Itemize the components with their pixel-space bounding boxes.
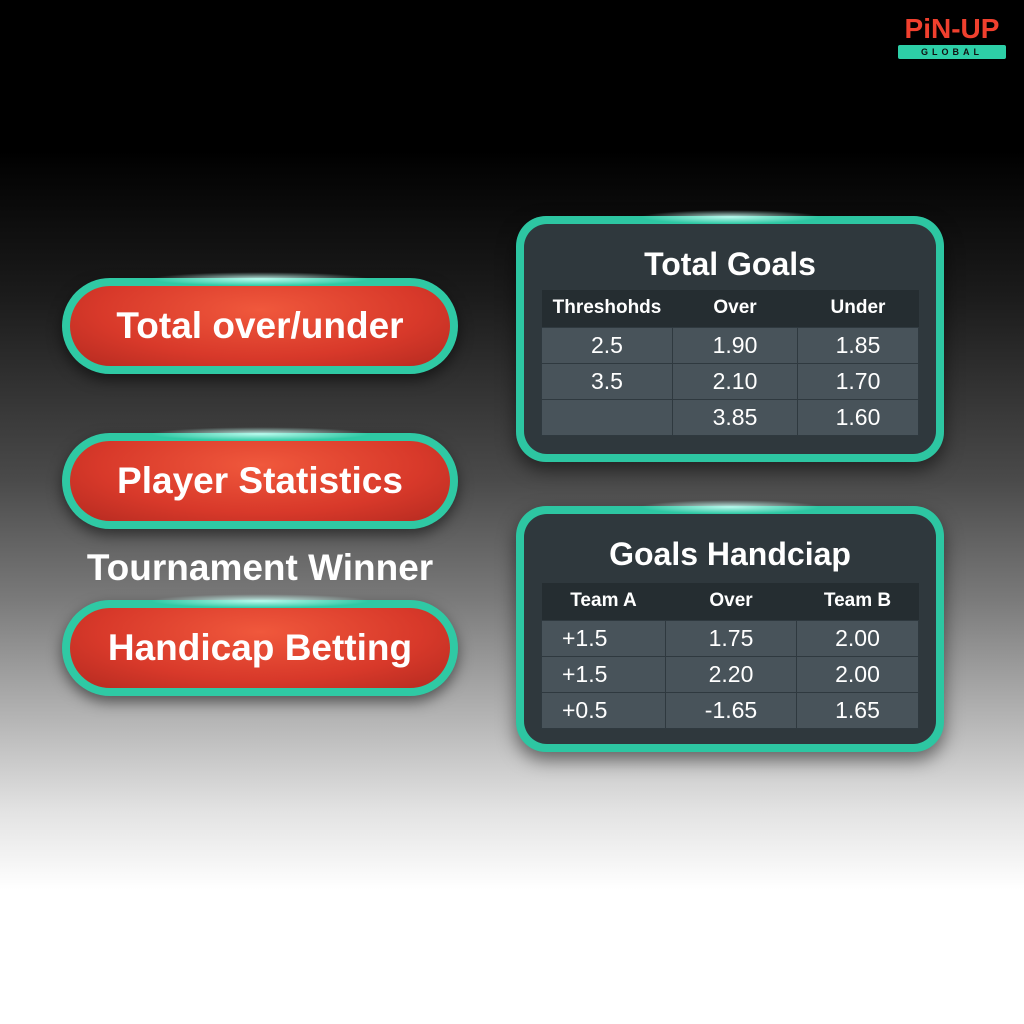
table: goals handicap: -1.65 <box>705 696 757 722</box>
table: goals handicap: 2.00 <box>835 660 880 686</box>
table: total goals: Threshohds <box>553 297 661 318</box>
table: total goals: Over <box>713 297 757 318</box>
table: total goals <box>542 290 919 435</box>
table: goals handicap: 1.65 <box>835 696 880 722</box>
table: goals handicap: +1.5 <box>562 660 607 686</box>
table: total goals: 3.5 <box>591 368 623 394</box>
pill: total over/under <box>62 278 458 374</box>
table: total goals: 1.85 <box>836 332 880 358</box>
panel: total goals <box>516 216 944 462</box>
heading: total goals: Total Goals <box>644 246 816 282</box>
table: total goals: 2.10 <box>713 368 757 394</box>
table: goals handicap: Over <box>709 590 753 611</box>
pill: player statistics <box>62 433 458 529</box>
table: total goals: 1.60 <box>836 404 880 430</box>
logo: PiN-UP <box>905 13 999 44</box>
pill: total over/under: Total over/under <box>116 305 404 346</box>
table: total goals: 3.85 <box>713 404 757 430</box>
table: goals handicap: Team B <box>824 590 891 611</box>
table: goals handicap <box>542 583 919 728</box>
pill: handicap betting: Handicap Betting <box>108 627 412 668</box>
table: goals handicap: +1.5 <box>562 624 607 650</box>
table: total goals: 1.90 <box>713 332 757 358</box>
heading: goals handicap: Goals Handciap <box>609 536 851 572</box>
table: goals handicap: 2.00 <box>835 624 880 650</box>
table: total goals: 2.5 <box>591 332 623 358</box>
table: goals handicap: Team A <box>570 590 637 611</box>
table: total goals: Under <box>831 297 885 318</box>
pill: handicap betting <box>62 600 458 696</box>
table: total goals: 1.70 <box>836 368 880 394</box>
table: goals handicap: +0.5 <box>562 696 607 722</box>
pill: player statistics: Player Statistics <box>117 460 403 501</box>
table: goals handicap: 2.20 <box>709 660 753 686</box>
tournament winner text: Tournament Winner <box>87 547 433 588</box>
logo <box>898 13 1006 59</box>
table: goals handicap: 1.75 <box>709 624 753 650</box>
logo: GLOBAL <box>921 47 983 57</box>
panel: goals handicap <box>516 506 944 752</box>
